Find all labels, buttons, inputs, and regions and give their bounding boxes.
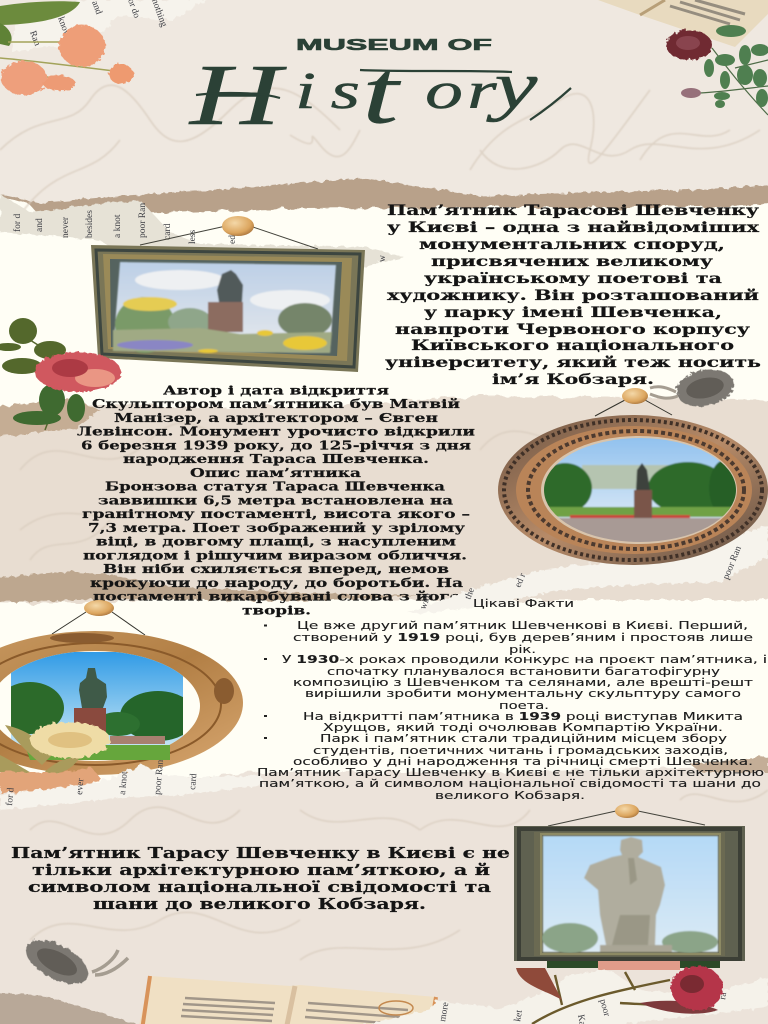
- intro paragraph: художнику. Він розташований: [387, 287, 759, 304]
- body paragraph: author, date, description: [77, 382, 475, 618]
- paper strip: behind first frame: ed: [228, 235, 238, 244]
- inner ring: [541, 436, 737, 544]
- intro paragraph: монументальних споруд,: [419, 237, 725, 253]
- closing statement: шани до великого Кобзаря.: [93, 896, 426, 913]
- background: middle parchment band: [0, 396, 768, 604]
- intro paragraph: українському поетові та: [424, 271, 722, 287]
- photo overflow below frame: [547, 960, 720, 970]
- leaves: [704, 25, 768, 108]
- paper strip: bottom right: poor: [597, 998, 611, 1018]
- strip sheet: [0, 194, 404, 266]
- facts list: поета.: [499, 700, 549, 712]
- intro paragraph: [385, 203, 761, 388]
- paper strip: bottom right: ra: [718, 991, 729, 1001]
- outer ring: [0, 631, 243, 775]
- photo: [544, 438, 736, 542]
- nail: [84, 600, 114, 616]
- facts list: [257, 620, 767, 802]
- body paragraph: author, date, description: творів.: [242, 602, 311, 618]
- pages: [138, 976, 436, 1024]
- rose bouquet, left: [0, 318, 121, 430]
- paper strip: left lower: poor Ran: [153, 759, 166, 795]
- script word: o: [425, 62, 463, 120]
- stem: [532, 972, 715, 1024]
- facts list: рік.: [509, 644, 536, 656]
- lower leaves: [13, 384, 85, 425]
- intro paragraph: присвячених великому: [431, 254, 713, 270]
- statue: [636, 463, 650, 490]
- script word: s: [331, 62, 360, 120]
- facts list: композицію з Шевченком та селянами, але врешті-решт: [293, 677, 753, 689]
- blossom: [30, 722, 110, 758]
- brown bottom-left corner: [0, 993, 155, 1024]
- rope ring: [528, 431, 744, 549]
- paper strip: behind first frame: never: [61, 216, 71, 238]
- intro paragraph: університету, який теж носить: [385, 354, 761, 371]
- strip sheet: [340, 970, 768, 1024]
- paper strip: diagonal right: poor Ran: [722, 545, 744, 581]
- green leaf: [0, 1, 80, 25]
- body paragraph: author, date, description: 7,3 метра. Поет зображений у зрілому: [88, 520, 465, 535]
- paper strip: bottom right: ket: [513, 1009, 525, 1023]
- florals: top right rose: [666, 25, 768, 115]
- open book: bottom: [138, 976, 436, 1024]
- blossom dark centre: [680, 975, 704, 993]
- facts list: У 1930 -х роках проводили конкурс на проєкт пам’ятника, і: [282, 654, 767, 666]
- book pages: [598, 0, 768, 47]
- paper strip: behind first frame: card: [163, 223, 173, 240]
- open book: top right: [598, 0, 768, 47]
- script word: y: [486, 49, 538, 122]
- body paragraph: author, date, description: народження Тараса Шевченка.: [123, 451, 429, 466]
- body paragraph: author, date, description: крокуючи до народу, до боротьби. На: [90, 575, 463, 590]
- body paragraph: author, date, description: віці, в довгому плащі, з насупленим: [96, 534, 456, 549]
- script word: t: [362, 43, 402, 143]
- green leaf, lower: [0, 23, 12, 46]
- wing spots: [33, 943, 81, 981]
- framed picture 2: oval bronze frame: [498, 388, 768, 565]
- pedestal: [208, 302, 243, 332]
- photo: [542, 836, 718, 953]
- left petal: [516, 968, 562, 1000]
- intro paragraph: Київського національного: [411, 338, 734, 354]
- leaves: [0, 318, 66, 374]
- statue: [584, 837, 665, 945]
- facts list: Хрущов, який тоді очолював Компартію України.: [323, 722, 723, 734]
- closing statement: тільки архітектурною пам’яткою, а й: [32, 862, 490, 879]
- nail: [222, 216, 254, 236]
- copper ring: [516, 426, 752, 554]
- ring line: [0, 643, 221, 765]
- frame: [514, 826, 745, 961]
- pedestal: [634, 490, 652, 518]
- body paragraph: author, date, description: постаменті викарбувані слова з його: [93, 589, 461, 604]
- ornament right: [214, 678, 234, 704]
- lawn: [545, 507, 735, 517]
- moth: bottom left: [19, 931, 128, 993]
- brown left blob, upper: [0, 398, 100, 438]
- facts list: студентів, поетичних читань і громадських заходів,: [313, 745, 728, 757]
- orange cluster middle: [43, 75, 75, 91]
- paper strip: behind first frame: poor Ran: [138, 203, 148, 238]
- strip words: more: [438, 1002, 451, 1023]
- red blossom: [671, 966, 723, 1010]
- paper strip: behind first frame: less: [188, 229, 198, 244]
- facts list: спочатку планувалося встановити багатофігурну: [327, 666, 720, 678]
- facts list: Пам’ятник Тарасу Шевченку в Києві є не тільки архітектурною: [257, 767, 764, 779]
- rose highlights: [676, 36, 700, 50]
- title: MUSEUM OF: MUSEUM OF: [296, 37, 492, 54]
- blossom centres: [48, 732, 92, 748]
- nail: [622, 388, 648, 404]
- paper strip: top left: [12, 0, 208, 52]
- strip words: with: [419, 591, 434, 611]
- facts list: Це вже другий пам’ятник Шевченкові в Києві. Перший,: [297, 620, 748, 632]
- paper strip: diagonal right: the: [464, 587, 477, 601]
- background: bottom parchment band: [0, 756, 768, 1024]
- intro paragraph: у Києві – одна з найвідоміших: [387, 219, 760, 236]
- frame gold inner line: [541, 834, 720, 954]
- facts list: вирішили зробити монументальну скульптуру самого: [305, 688, 741, 700]
- text lines: [181, 998, 408, 1024]
- paper strip: left lower: a knot: [118, 771, 130, 795]
- lawn: [25, 745, 170, 760]
- facts list: пам’яткою, а й символом національної свідомості та шани до: [259, 778, 761, 790]
- facts list: особливо у дні народження та річниці смерті Шевченка.: [293, 756, 753, 768]
- framed picture 1: monument with flowers: [91, 216, 365, 372]
- body paragraph: author, date, description: Скульптором пам’ятника був Матвій: [92, 396, 460, 411]
- paper strip: top left: Ran: [27, 30, 42, 48]
- brown tear right: [690, 756, 768, 772]
- stems: [0, 42, 122, 82]
- strip sheet: [407, 526, 768, 614]
- dark trees: [547, 960, 720, 968]
- body paragraph: author, date, description: гранітному постаменті, висота якого –: [82, 506, 470, 521]
- paper strip: left lower: card: [188, 773, 199, 790]
- strip sheet: [0, 765, 262, 810]
- facts list: великого Кобзаря.: [435, 790, 585, 802]
- leaves: [0, 725, 80, 775]
- body paragraph: author, date, description: Він ніби схиляється вперед, немов: [103, 561, 450, 576]
- flourish: long crossbar: [196, 70, 571, 120]
- body paragraph: author, date, description: поглядом і рішучим виразом обличчя.: [83, 548, 467, 562]
- strip sheet: [12, 0, 208, 52]
- antennae: [92, 950, 128, 975]
- orange cluster left: [1, 61, 47, 95]
- hanging wire: [548, 811, 705, 826]
- paper strip: left lower: [0, 759, 262, 810]
- facts list: На відкритті пам’ятника в 1939 році виступав Микита: [303, 711, 743, 723]
- closing statement: Пам’ятник Тарасу Шевченку в Києві є не: [11, 845, 510, 862]
- trees: [115, 297, 175, 353]
- outer ring: [498, 415, 768, 565]
- body paragraph: author, date, description: заввишки 6,5 метра встановлена на: [98, 492, 453, 508]
- hanging wire: [52, 612, 145, 635]
- intro paragraph: Пам’ятник Тарасові Шевченку: [387, 203, 759, 219]
- body paragraph: author, date, description: 6 березня 1939 року, до 125-річчя з дня: [81, 438, 471, 452]
- orange page edges: [142, 976, 436, 1024]
- heading: interesting facts: Цікаві Факти: [473, 598, 574, 610]
- intro paragraph: навпроти Червоного корпусу: [395, 322, 750, 338]
- white building: [582, 465, 674, 489]
- hanging wire: [140, 226, 318, 249]
- facts list: Парк і пам’ятник стали традиційним місцем збору: [320, 733, 727, 745]
- torn brown edge, top band: [0, 0, 768, 216]
- wing spots: [684, 374, 726, 402]
- framed picture 3: oval gold frame: [0, 600, 243, 793]
- book spine: [640, 0, 665, 15]
- intro paragraph: у парку імені Шевченка,: [424, 305, 722, 321]
- stem: [700, 48, 768, 115]
- script word: H: [188, 48, 288, 143]
- orange cluster large: [59, 25, 105, 67]
- title: History: [188, 43, 571, 143]
- paper strip: behind first frame: and: [35, 218, 45, 232]
- bud: [681, 88, 701, 98]
- steps: [110, 736, 165, 744]
- paper strip: behind first frame: [0, 194, 404, 266]
- rose light: [75, 369, 115, 387]
- frame: [91, 245, 365, 372]
- body paragraph: author, date, description: Левінсон. Монумент урочисто відкрили: [77, 424, 475, 439]
- stem: [30, 340, 70, 430]
- paper strip: left lower: ever: [75, 777, 86, 795]
- photo: [113, 262, 336, 353]
- red rose: [666, 30, 712, 60]
- wing: [19, 931, 95, 993]
- wing: [673, 364, 737, 412]
- red flower rows: [570, 515, 690, 518]
- dried flower: bottom right: [516, 966, 723, 1024]
- background: top parchment band: [0, 0, 768, 216]
- statue: [79, 668, 107, 708]
- closing statement: символом національної свідомості та: [28, 879, 492, 896]
- coffee ring: [379, 1001, 413, 1015]
- paper strip: diagonal right: ed r: [514, 571, 529, 589]
- bullets: [264, 624, 267, 739]
- orange torn tape: [0, 768, 102, 793]
- ornament top: [50, 633, 114, 643]
- framed picture 4: statue close-up: [514, 804, 745, 970]
- pink pedestal: [598, 960, 680, 970]
- hanging wire: [595, 400, 672, 416]
- photo: [11, 652, 183, 760]
- clouds: [135, 270, 225, 290]
- strip words: for d: [12, 214, 23, 232]
- spine shadow: [286, 986, 295, 1024]
- florals: top left: [0, 1, 133, 95]
- inner opening: [0, 651, 200, 761]
- right tree: [120, 691, 183, 740]
- parchment sheet, bottom band: [0, 766, 768, 1024]
- parchment sheet, top band: [0, 0, 768, 203]
- script word: i: [295, 62, 316, 120]
- pedestal: [74, 708, 106, 732]
- body paragraph: author, date, description: Автор і дата відкриття: [163, 382, 389, 398]
- paper strip: diagonal right: [407, 526, 768, 614]
- pedestal: [600, 945, 672, 952]
- body paragraph: author, date, description: Опис пам’ятника: [190, 465, 361, 480]
- beaded rim: [504, 420, 762, 560]
- orange cluster right: [109, 64, 133, 84]
- strip words: for d: [4, 787, 17, 806]
- body paragraph: author, date, description: Манізер, а архітектором – Євген: [114, 410, 438, 425]
- paper strip: top left: know: [55, 16, 72, 39]
- paper strip: behind first frame: a knot: [113, 214, 123, 238]
- facts list: створений у 1919 році, був дерев’яним і простояв лише: [293, 632, 753, 644]
- left tree: [11, 682, 64, 734]
- script word: r: [467, 62, 497, 120]
- body paragraph: author, date, description: Бронзова статуя Тараса Шевченка: [105, 479, 445, 494]
- dried flower: [0, 722, 110, 775]
- book text lines: [670, 0, 745, 24]
- intro paragraph: ім’я Кобзаря.: [492, 372, 654, 388]
- paper strip: behind first frame: w: [378, 255, 388, 262]
- tree masses: [544, 462, 593, 508]
- nail: [615, 804, 639, 818]
- pavement: [558, 516, 722, 542]
- paper strip: behind first frame: besides: [85, 210, 95, 238]
- trees: [542, 923, 598, 953]
- closing statement: [11, 845, 510, 913]
- rose: [35, 352, 121, 392]
- antennae: [650, 387, 678, 398]
- brown left blob, lower: [0, 572, 420, 602]
- lower leaf: [640, 1001, 718, 1014]
- moth: top right: [650, 364, 737, 412]
- flowerbed: [113, 328, 332, 353]
- paper strip: bottom right: [340, 970, 768, 1024]
- strip words: and: [89, 0, 103, 16]
- statue: [217, 270, 243, 302]
- coat shadow: [612, 858, 650, 945]
- parchment sheet, middle band: [0, 396, 768, 604]
